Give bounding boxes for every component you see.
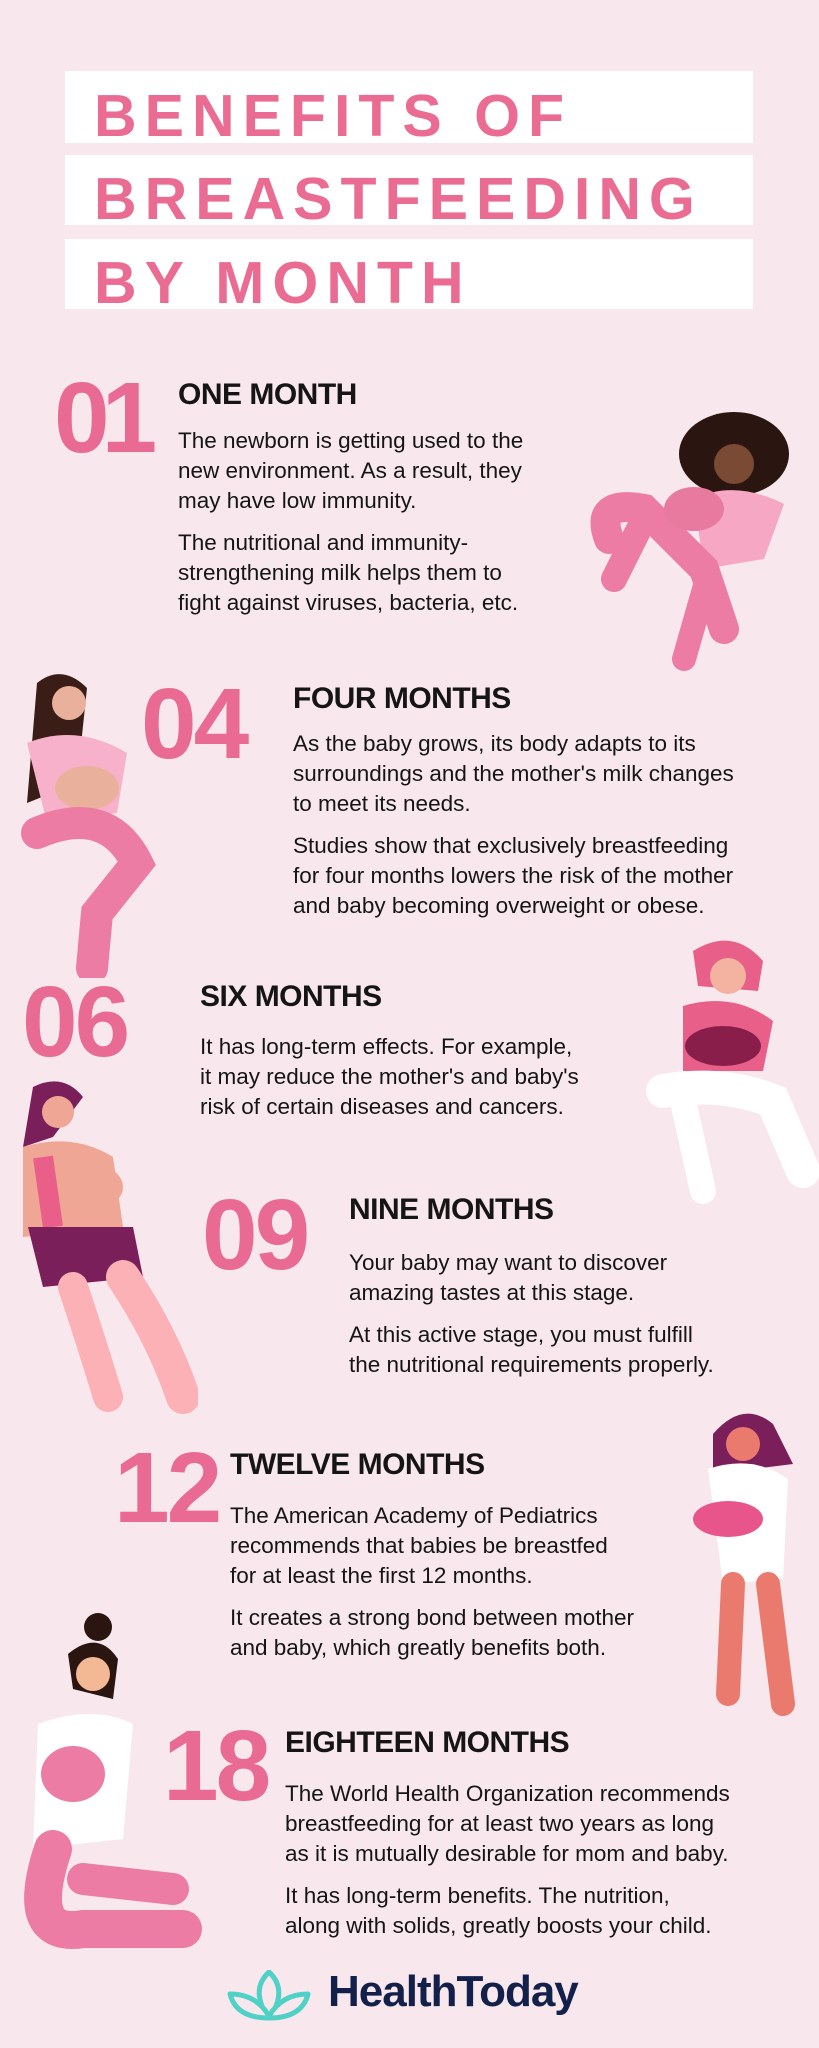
heading: SIX MONTHS: [200, 980, 382, 1013]
body text: for at least the first 12 months.: [230, 1563, 533, 1588]
body text: recommends that babies be breastfed: [230, 1533, 608, 1558]
body text: it may reduce the mother's and baby's: [200, 1064, 579, 1089]
body text: [349, 1250, 714, 1377]
heading: TWELVE MONTHS: [230, 1448, 485, 1481]
body text: for four months lowers the risk of the mother: [293, 863, 733, 888]
heading: ONE MONTH: [178, 378, 357, 411]
body text: [293, 731, 734, 918]
number 09: 09: [202, 1179, 307, 1291]
number 12: 12: [114, 1432, 219, 1544]
body text: may have low immunity.: [178, 488, 416, 513]
body text: and baby becoming overweight or obese.: [293, 893, 705, 918]
illustration: mother 6: [24, 1613, 202, 1949]
body text: It has long-term benefits. The nutrition,: [285, 1883, 670, 1908]
body text: The American Academy of Pediatrics: [230, 1503, 598, 1528]
body text: new environment. As a result, they: [178, 458, 522, 483]
body text: risk of certain diseases and cancers.: [200, 1094, 564, 1119]
section: one month: [54, 362, 523, 615]
body text: The newborn is getting used to the: [178, 428, 523, 453]
body text: The World Health Organization recommends: [285, 1781, 730, 1806]
body text: Your baby may want to discover: [349, 1250, 667, 1275]
body text: and baby, which greatly benefits both.: [230, 1635, 606, 1660]
body text: surroundings and the mother's milk changes: [293, 761, 734, 786]
illustration: mother 4: [23, 1081, 198, 1414]
number 06: 06: [22, 966, 127, 1078]
body text: It has long-term effects. For example,: [200, 1034, 572, 1059]
title: BENEFITS OF: [94, 83, 572, 149]
body text: strengthening milk helps them to: [178, 560, 502, 585]
section: twelve months: [114, 1432, 634, 1660]
section: eighteen months: [163, 1710, 730, 1938]
wordmark: HealthToday: [328, 1967, 578, 2016]
body text: amazing tastes at this stage.: [349, 1280, 634, 1305]
body text: Studies show that exclusively breastfeeding: [293, 833, 728, 858]
illustration: mother 1: [590, 412, 789, 671]
body text: At this active stage, you must fulfill: [349, 1322, 693, 1347]
body text: As the baby grows, its body adapts to its: [293, 731, 696, 756]
body text: It creates a strong bond between mother: [230, 1605, 634, 1630]
heading: EIGHTEEN MONTHS: [285, 1726, 569, 1759]
body text: [230, 1503, 634, 1660]
heading: FOUR MONTHS: [293, 682, 511, 715]
title: [65, 71, 753, 316]
body text: [285, 1781, 730, 1938]
number 04: 04: [141, 668, 246, 780]
body text: as it is mutually desirable for mom and baby.: [285, 1841, 729, 1866]
section: nine months: [202, 1179, 714, 1377]
body text: fight against viruses, bacteria, etc.: [178, 590, 518, 615]
title: BREASTFEEDING: [94, 166, 703, 232]
title: BY MONTH: [94, 250, 472, 316]
icon: lotus: [228, 1970, 310, 2020]
section: four months: [141, 668, 734, 918]
body text: along with solids, greatly boosts your child.: [285, 1913, 711, 1938]
body text: [200, 1034, 579, 1119]
illustration: mother 3: [646, 940, 819, 1204]
illustration: mother 5: [693, 1414, 795, 1716]
body text: The nutritional and immunity-: [178, 530, 468, 555]
section: six months: [22, 966, 579, 1119]
heading: NINE MONTHS: [349, 1193, 554, 1226]
body text: to meet its needs.: [293, 791, 471, 816]
body text: [178, 428, 523, 615]
number 01: 01: [54, 362, 149, 474]
body text: breastfeeding for at least two years as long: [285, 1811, 714, 1836]
logo: HealthToday: [228, 1967, 578, 2020]
number 18: 18: [163, 1710, 268, 1822]
body text: the nutritional requirements properly.: [349, 1352, 714, 1377]
illustration: mother 2: [21, 674, 156, 978]
